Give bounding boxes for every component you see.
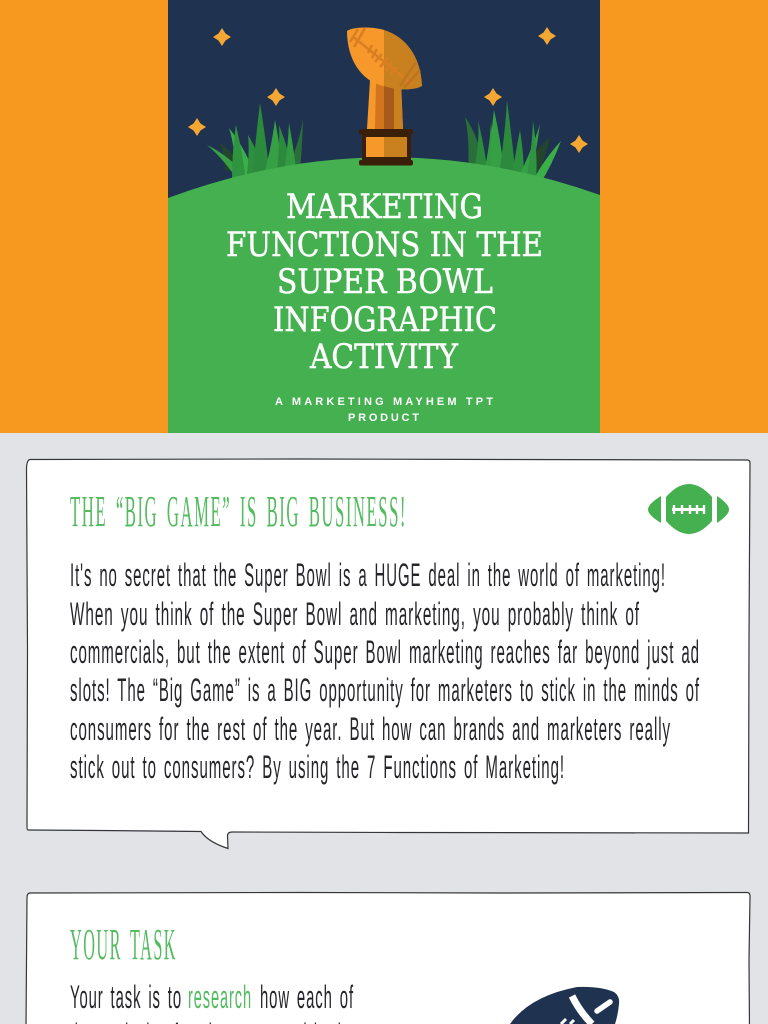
panel: your task: how each of [260,979,354,1015]
panel: the big game speech bubble [26,459,750,848]
title: FUNCTIONS IN THE [226,225,543,265]
title: MARKETING [286,187,483,227]
speech bubble outline [26,459,750,848]
icon: green football [648,484,729,534]
title: INFOGRAPHIC [273,300,497,340]
body text: research [188,979,252,1015]
icon: trophy [347,27,422,166]
title: ACTIVITY [309,337,458,377]
body text: Your task is to [70,979,182,1015]
subtitle [275,396,493,424]
subtitle: PRODUCT [348,412,419,424]
hill [168,157,600,433]
icon: navy football [510,987,619,1024]
subtitle: A MARKETING MAYHEM TPT [275,396,493,408]
panel: your task [26,892,750,1024]
panel: your task: YOUR TASK [70,920,177,969]
panel: orange hero banner [0,0,768,433]
body text [70,979,355,1024]
icon: right grass [465,100,561,184]
icon: left grass [207,103,303,184]
body text [70,557,700,785]
title [226,187,543,377]
title: SUPER BOWL [277,262,493,302]
icon: stars [188,27,588,153]
card outline [26,892,750,1024]
